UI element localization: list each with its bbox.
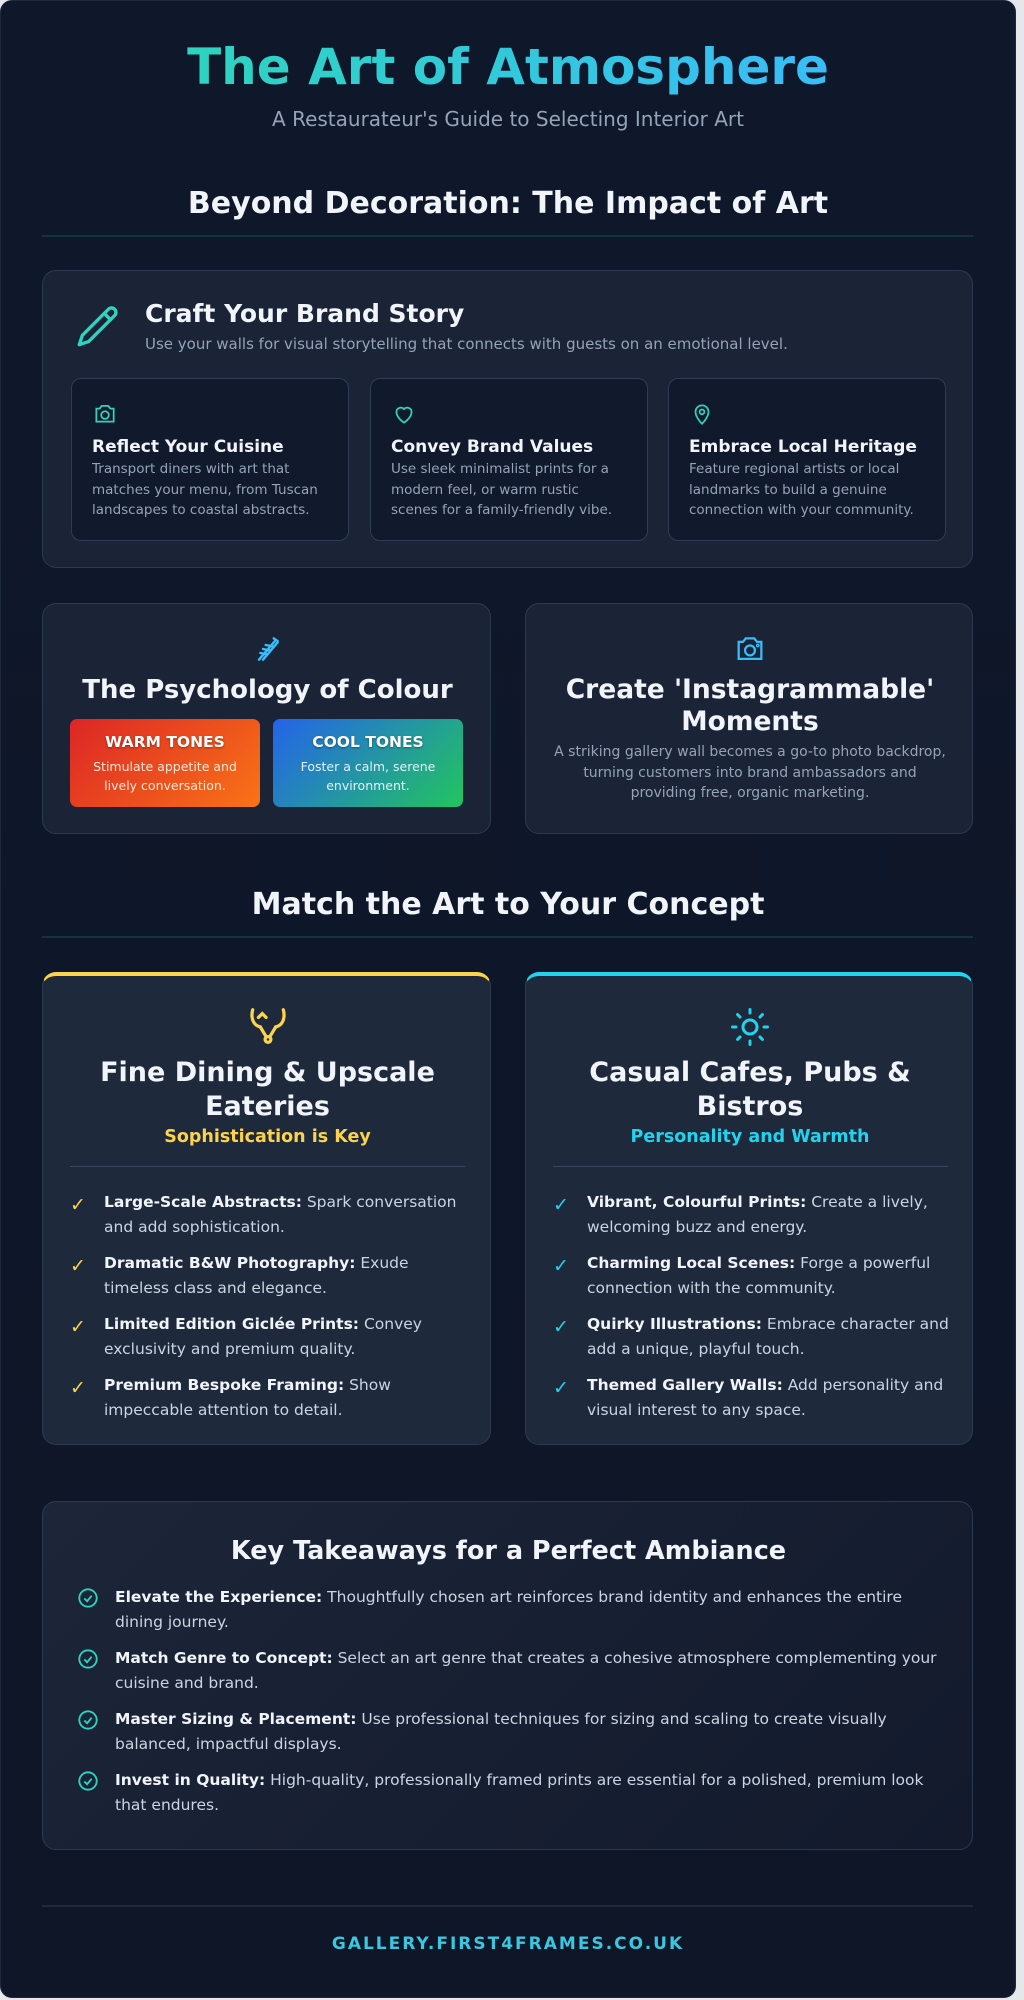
card: convey brand values: Use sleek minimalist prints for a modern feel, or warm rustic scenes for a family-friendly vibe. — [391, 461, 612, 518]
text: A striking gallery wall becomes a go-to photo backdrop, turning customers into brand ambassadors and providing free, organic marketing. — [554, 744, 946, 801]
footer: GALLERY.FIRST4FRAMES.CO.UK — [332, 1934, 684, 1954]
card: embrace local heritage — [668, 378, 946, 541]
list: takeaways: Invest in Quality: High-quality, professionally framed prints are essential for a polished, premium look that endures. — [115, 1771, 924, 1814]
card: convey brand values — [370, 378, 648, 541]
panel: instagrammable moments — [525, 603, 973, 834]
list: casual: Themed Gallery Walls: Add personality and visual interest to any space. — [587, 1376, 943, 1418]
card: reflect your cuisine — [71, 378, 349, 541]
list: casual: ✓ — [553, 1377, 569, 1399]
box: warm tones: lively conversation. — [104, 778, 226, 793]
card: embrace local heritage: Feature regional artists or local landmarks to build a genuine connection with your community. — [689, 461, 914, 518]
heading: Key Takeaways for a Perfect Ambiance — [231, 1536, 786, 1566]
list: takeaways: Match Genre to Concept: Select an art genre that creates a cohesive atmosphere complementing your cuisine and brand. — [115, 1649, 937, 1692]
list: fine dining: ✓ — [70, 1194, 86, 1216]
heading: Create 'Instagrammable' — [566, 674, 934, 705]
box: warm tones — [70, 719, 260, 807]
list: fine dining: Premium Bespoke Framing: Show impeccable attention to detail. — [104, 1376, 391, 1418]
list: casual: ✓ — [553, 1316, 569, 1338]
box: cool tones: environment. — [326, 778, 410, 793]
card: reflect your cuisine: Transport diners with art that matches your menu, from Tuscan landscapes to coastal abstracts. — [92, 461, 318, 518]
heading: Moments — [681, 706, 819, 737]
list: fine dining: Dramatic B&W Photography: Exude timeless class and elegance. — [104, 1254, 409, 1296]
list: takeaways: Master Sizing & Placement: Use professional techniques for sizing and scaling to create visually balanced, impactful displays. — [115, 1710, 887, 1752]
heading: Beyond Decoration: Beyond Decoration: The Impact of Art — [188, 186, 828, 221]
list: fine dining: ✓ — [70, 1255, 86, 1277]
heading: Bistros — [697, 1091, 803, 1122]
heading: craft your brand story: Craft Your Brand Story — [145, 299, 464, 328]
text: description: Use your walls for visual storytelling that connects with guests on an emotional level. — [145, 335, 788, 353]
list: takeaways — [78, 1588, 937, 1814]
list: casual: ✓ — [553, 1194, 569, 1216]
list: fine dining: Limited Edition Giclée Prints: Convey exclusivity and premium quality. — [104, 1315, 422, 1358]
panel: key takeaways — [42, 1501, 973, 1850]
panel: casual cafes — [525, 972, 973, 1445]
heading — [566, 674, 934, 737]
card: embrace local heritage: Embrace Local Heritage — [689, 437, 917, 457]
list: casual: Vibrant, Colourful Prints: Create a lively, welcoming buzz and energy. — [587, 1193, 928, 1236]
box: cool tones: COOL TONES — [312, 733, 424, 751]
subtitle: A Restaurateur's Guide to Selecting Interior Art — [272, 107, 744, 131]
box: cool tones: Foster a calm, serene — [301, 759, 435, 774]
panel: psychology of colour — [42, 603, 491, 834]
list: fine dining: ✓ — [70, 1377, 86, 1399]
heading: Eateries — [205, 1091, 330, 1122]
icon: camera — [738, 637, 762, 660]
list: fine dining: Large-Scale Abstracts: Spark conversation and add sophistication. — [104, 1193, 456, 1236]
heading: Casual Cafes, Pubs & — [589, 1057, 911, 1088]
list: casual: ✓ — [553, 1255, 569, 1277]
icon: map pin — [694, 404, 710, 425]
box: warm tones: Stimulate appetite and — [93, 759, 237, 774]
heading — [589, 1057, 911, 1122]
panel: craft brand story — [42, 270, 973, 568]
card: reflect your cuisine: Reflect Your Cuisine — [92, 437, 284, 457]
title: The Art of Atmosphere — [187, 38, 829, 96]
icon: camera — [95, 405, 115, 422]
card: convey brand values: Convey Brand Values — [391, 437, 593, 457]
icon: pencil — [78, 306, 118, 346]
list: takeaways: Elevate the Experience: Thoughtfully chosen art reinforces brand identity and enhances the entire dining journey. — [115, 1588, 902, 1630]
icon: heart — [396, 406, 412, 424]
box: cool tones — [273, 719, 463, 807]
heading: The Psychology of Colour — [82, 675, 453, 705]
list: fine dining: ✓ — [70, 1316, 86, 1338]
list: casual: Charming Local Scenes: Forge a powerful connection with the community. — [587, 1254, 930, 1296]
subheading: Sophistication is Key — [164, 1127, 371, 1147]
icon: brush — [258, 637, 279, 661]
subheading: Personality and Warmth — [631, 1127, 869, 1147]
heading: match the art: Match the Art to Your Concept — [252, 887, 764, 922]
list: fine dining — [70, 1193, 456, 1418]
heading — [100, 1057, 435, 1122]
icon: wine glasses — [250, 1008, 286, 1044]
panel: fine dining — [42, 972, 491, 1445]
box: warm tones: WARM TONES — [105, 733, 225, 751]
heading: Fine Dining & Upscale — [100, 1057, 435, 1088]
list: casual: Quirky Illustrations: Embrace character and add a unique, playful touch. — [587, 1315, 949, 1358]
list: casual — [553, 1193, 949, 1418]
icon: sun — [731, 1008, 769, 1046]
